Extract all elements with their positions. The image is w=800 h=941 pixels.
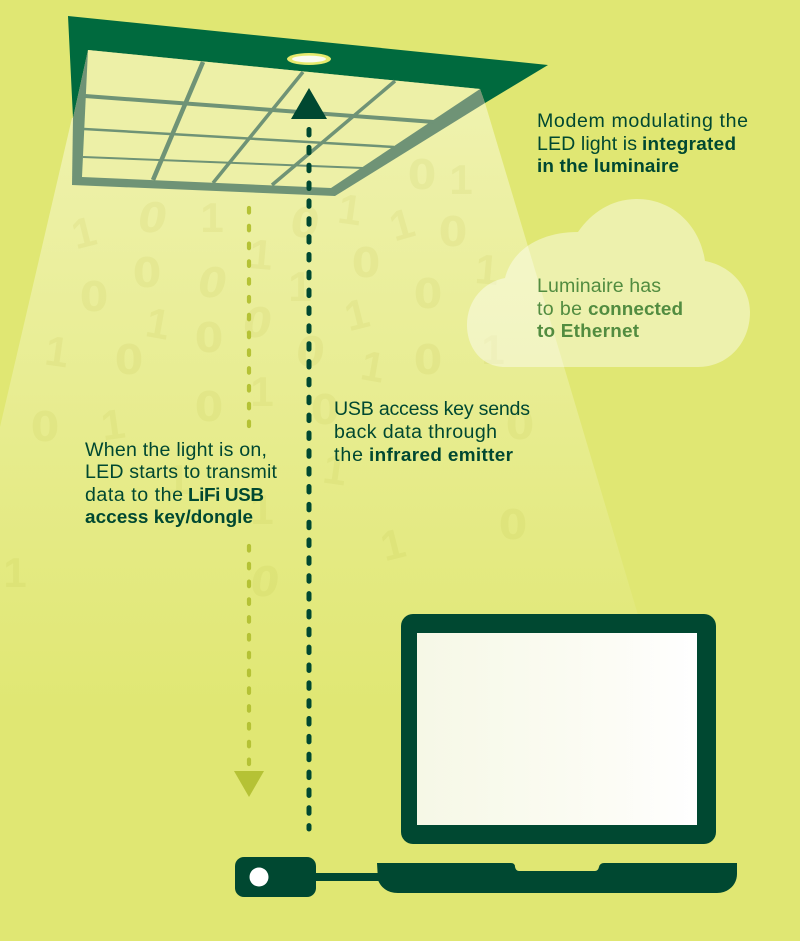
text: USB key	[334, 398, 530, 466]
binary digits in the light: 1	[42, 327, 72, 376]
USB dongle	[235, 857, 380, 897]
binary digits in the light: 1	[384, 199, 420, 250]
binary digits in the light: 1	[340, 289, 374, 340]
binary digits in the light: 0	[287, 199, 323, 247]
ceiling	[68, 16, 548, 118]
binary digits in the light: 1	[449, 156, 473, 203]
binary digits in the light: 0	[115, 336, 143, 384]
binary digits in the light: 0	[311, 386, 339, 434]
text: USB key: infrared emitter	[369, 445, 514, 466]
binary digits in the light: 1	[67, 207, 101, 258]
binary digits in the light: 1	[358, 341, 389, 392]
binary digits in the light: 0	[499, 501, 527, 549]
binary digits in the light: 1	[250, 486, 274, 533]
text: ethernet: to be	[537, 298, 582, 320]
text: LED transmit: data to the	[85, 484, 183, 506]
panel grid	[83, 62, 434, 185]
binary digits in the light: 0	[408, 151, 436, 199]
text: LED transmit	[85, 439, 278, 528]
binary digits in the light: 0	[439, 208, 467, 256]
binary digits in the light: 0	[247, 558, 283, 606]
text: LED transmit: LiFi USB	[188, 485, 264, 506]
arrow: LED data down	[234, 208, 264, 797]
binary digits in the light: 1	[473, 245, 501, 294]
text: ethernet: to Ethernet	[537, 321, 640, 342]
text: USB key: the	[334, 444, 363, 466]
binary digits in the light	[3, 151, 534, 606]
LED lamp	[287, 53, 331, 65]
binary digits in the light: 0	[195, 383, 223, 431]
laptop base	[377, 863, 737, 893]
binary digits in the light: 0	[414, 270, 442, 318]
arrow: infrared data up	[291, 88, 327, 829]
binary digits in the light: 0	[134, 194, 171, 242]
binary digits in the light: 1	[250, 368, 274, 415]
text: USB key: back data through	[334, 421, 497, 443]
binary digits in the light: 1	[3, 549, 27, 596]
laptop screen	[401, 614, 716, 844]
binary digits in the light: 0	[414, 336, 442, 384]
laptop	[377, 614, 737, 893]
text: ethernet	[537, 275, 683, 342]
binary digits in the light: 1	[98, 400, 128, 449]
binary digits in the light: 0	[506, 401, 534, 449]
binary digits in the light: 1	[320, 445, 350, 494]
binary digits in the light: 1	[481, 326, 505, 373]
binary digits in the light: 0	[195, 314, 223, 362]
panel surface	[82, 50, 480, 188]
binary digits in the light: 1	[143, 298, 174, 349]
binary digits in the light: 0	[80, 273, 108, 321]
binary digits in the light: 1	[288, 263, 312, 310]
text: modem	[537, 110, 748, 177]
binary digits in the light: 0	[294, 328, 327, 376]
text: modem: Modem modulating the	[537, 110, 748, 132]
binary digits in the light: 0	[239, 299, 276, 347]
text: modem: in the luminaire	[537, 156, 679, 177]
cloud	[467, 199, 750, 367]
text: ethernet: Luminaire has	[537, 275, 661, 297]
luminaire panel	[72, 50, 485, 196]
panel frame	[72, 50, 485, 196]
text: LED transmit: LED starts to transmit	[85, 461, 278, 483]
text: ethernet: connected	[588, 299, 683, 320]
binary digits in the light: 0	[31, 403, 59, 451]
binary digits in the light: 1	[166, 456, 190, 503]
text: LED transmit: When the light is on,	[85, 439, 267, 461]
binary digits in the light: 1	[376, 519, 410, 570]
text: LED transmit: access key/dongle	[85, 507, 253, 528]
binary digits in the light: 0	[352, 239, 380, 287]
binary digits in the light: 0	[133, 249, 161, 297]
text: modem: LED light is	[537, 133, 637, 155]
binary digits in the light: 0	[194, 259, 231, 307]
binary digits in the light: 1	[335, 185, 365, 234]
binary digits in the light: 1	[247, 230, 275, 279]
binary digits in the light: 1	[200, 194, 224, 241]
text: USB key: USB access key sends	[334, 398, 530, 420]
text: modem: integrated	[642, 134, 736, 155]
